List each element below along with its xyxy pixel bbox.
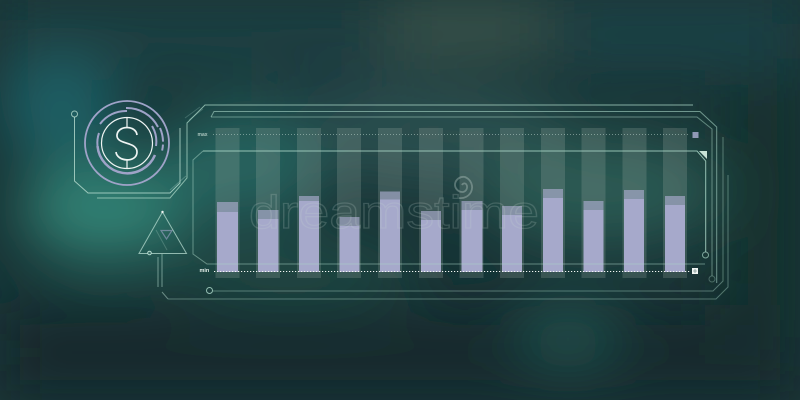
inner small triangle: [161, 230, 172, 239]
max guide line: [198, 132, 698, 138]
icon: dollar coin: [85, 101, 169, 185]
dollar sign: [116, 128, 137, 160]
min label: min: [200, 268, 210, 274]
icon: warning triangle with arrow: [139, 211, 186, 299]
watermark spiral: [455, 177, 472, 198]
coin connector lines: [72, 111, 186, 193]
frame corner accent: [699, 151, 707, 159]
inner ring: [102, 118, 152, 168]
outer ring: [85, 101, 169, 185]
max marker: [692, 132, 698, 138]
triangle: [139, 212, 186, 254]
chart: column bars: [216, 128, 687, 278]
bar caps: [217, 189, 685, 226]
apex dot: [161, 211, 164, 213]
min guide line: [200, 268, 698, 274]
watermark: dreamstime: [249, 186, 539, 238]
inner diagonal: [156, 230, 167, 250]
chart frame: circuit lines: [97, 105, 728, 299]
min marker: [692, 268, 698, 274]
node: [148, 251, 151, 255]
broken middle rings: [126, 108, 158, 127]
column tracks: [216, 128, 687, 278]
stem: [158, 254, 162, 287]
frame connectors: circles: [206, 252, 715, 294]
max label: max: [198, 132, 208, 138]
bar bodies: [217, 198, 685, 272]
